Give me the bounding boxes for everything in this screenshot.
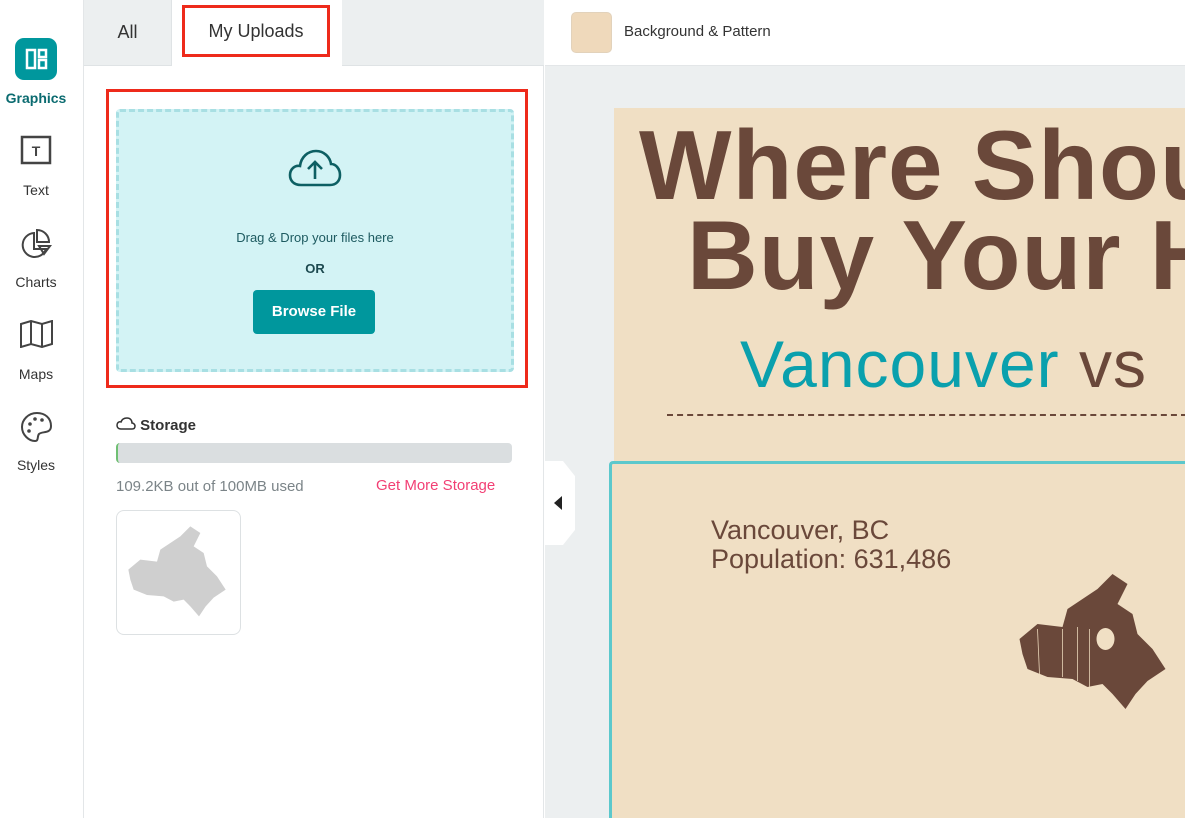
storage heading <box>116 417 196 434</box>
drop zone <box>116 109 514 372</box>
text: background & pattern: Background & Pattern <box>624 23 771 40</box>
tab: all <box>84 0 172 65</box>
icon: styles <box>21 412 52 442</box>
top toolbar <box>545 0 1185 66</box>
label: maps: Maps <box>19 366 53 382</box>
icon: graphics <box>15 38 57 80</box>
icon: text: T <box>32 143 41 159</box>
red highlight: drop zone <box>106 89 528 388</box>
label: charts: Charts <box>15 274 57 290</box>
panel: vancouver <box>609 461 1185 818</box>
text: city and population <box>711 515 951 574</box>
icon: charts <box>22 229 52 258</box>
text: city and population: Population: 631,486 <box>711 544 951 574</box>
link: get more storage: Get More Storage <box>376 477 495 494</box>
canvas area <box>545 66 1185 818</box>
dashed divider <box>667 414 1185 416</box>
uploaded thumbnail <box>116 510 241 635</box>
highlight box <box>182 5 330 57</box>
text: drag and drop: Drag & Drop your files here <box>236 230 394 245</box>
title <box>639 110 1185 310</box>
storage heading: Storage <box>140 417 196 434</box>
storage usage text: 109.2KB out of 100MB used <box>116 478 304 495</box>
sidebar <box>0 0 84 818</box>
map: canada <box>1020 574 1166 709</box>
tab: all: All <box>117 22 138 42</box>
icon: text <box>20 136 52 164</box>
collapse tab <box>545 461 575 545</box>
icon: maps <box>20 320 53 348</box>
text: or: OR <box>305 261 325 276</box>
highlight box: My Uploads <box>208 21 304 41</box>
swatch: background pattern <box>571 12 612 53</box>
label: graphics: Graphics <box>6 90 66 106</box>
button: browse file <box>253 290 375 334</box>
label: styles: Styles <box>17 457 55 473</box>
label: text: Text <box>23 182 49 198</box>
tab: my uploads <box>172 0 342 66</box>
button: browse file: Browse File <box>272 303 356 320</box>
icon: cloud upload <box>288 150 342 186</box>
storage bar <box>116 443 512 463</box>
tab bar <box>84 0 544 66</box>
infographic <box>614 108 1185 818</box>
subtitle: Vancouver vs <box>740 327 1147 401</box>
text: city and population: Vancouver, BC <box>711 515 889 545</box>
upload panel <box>84 66 544 818</box>
